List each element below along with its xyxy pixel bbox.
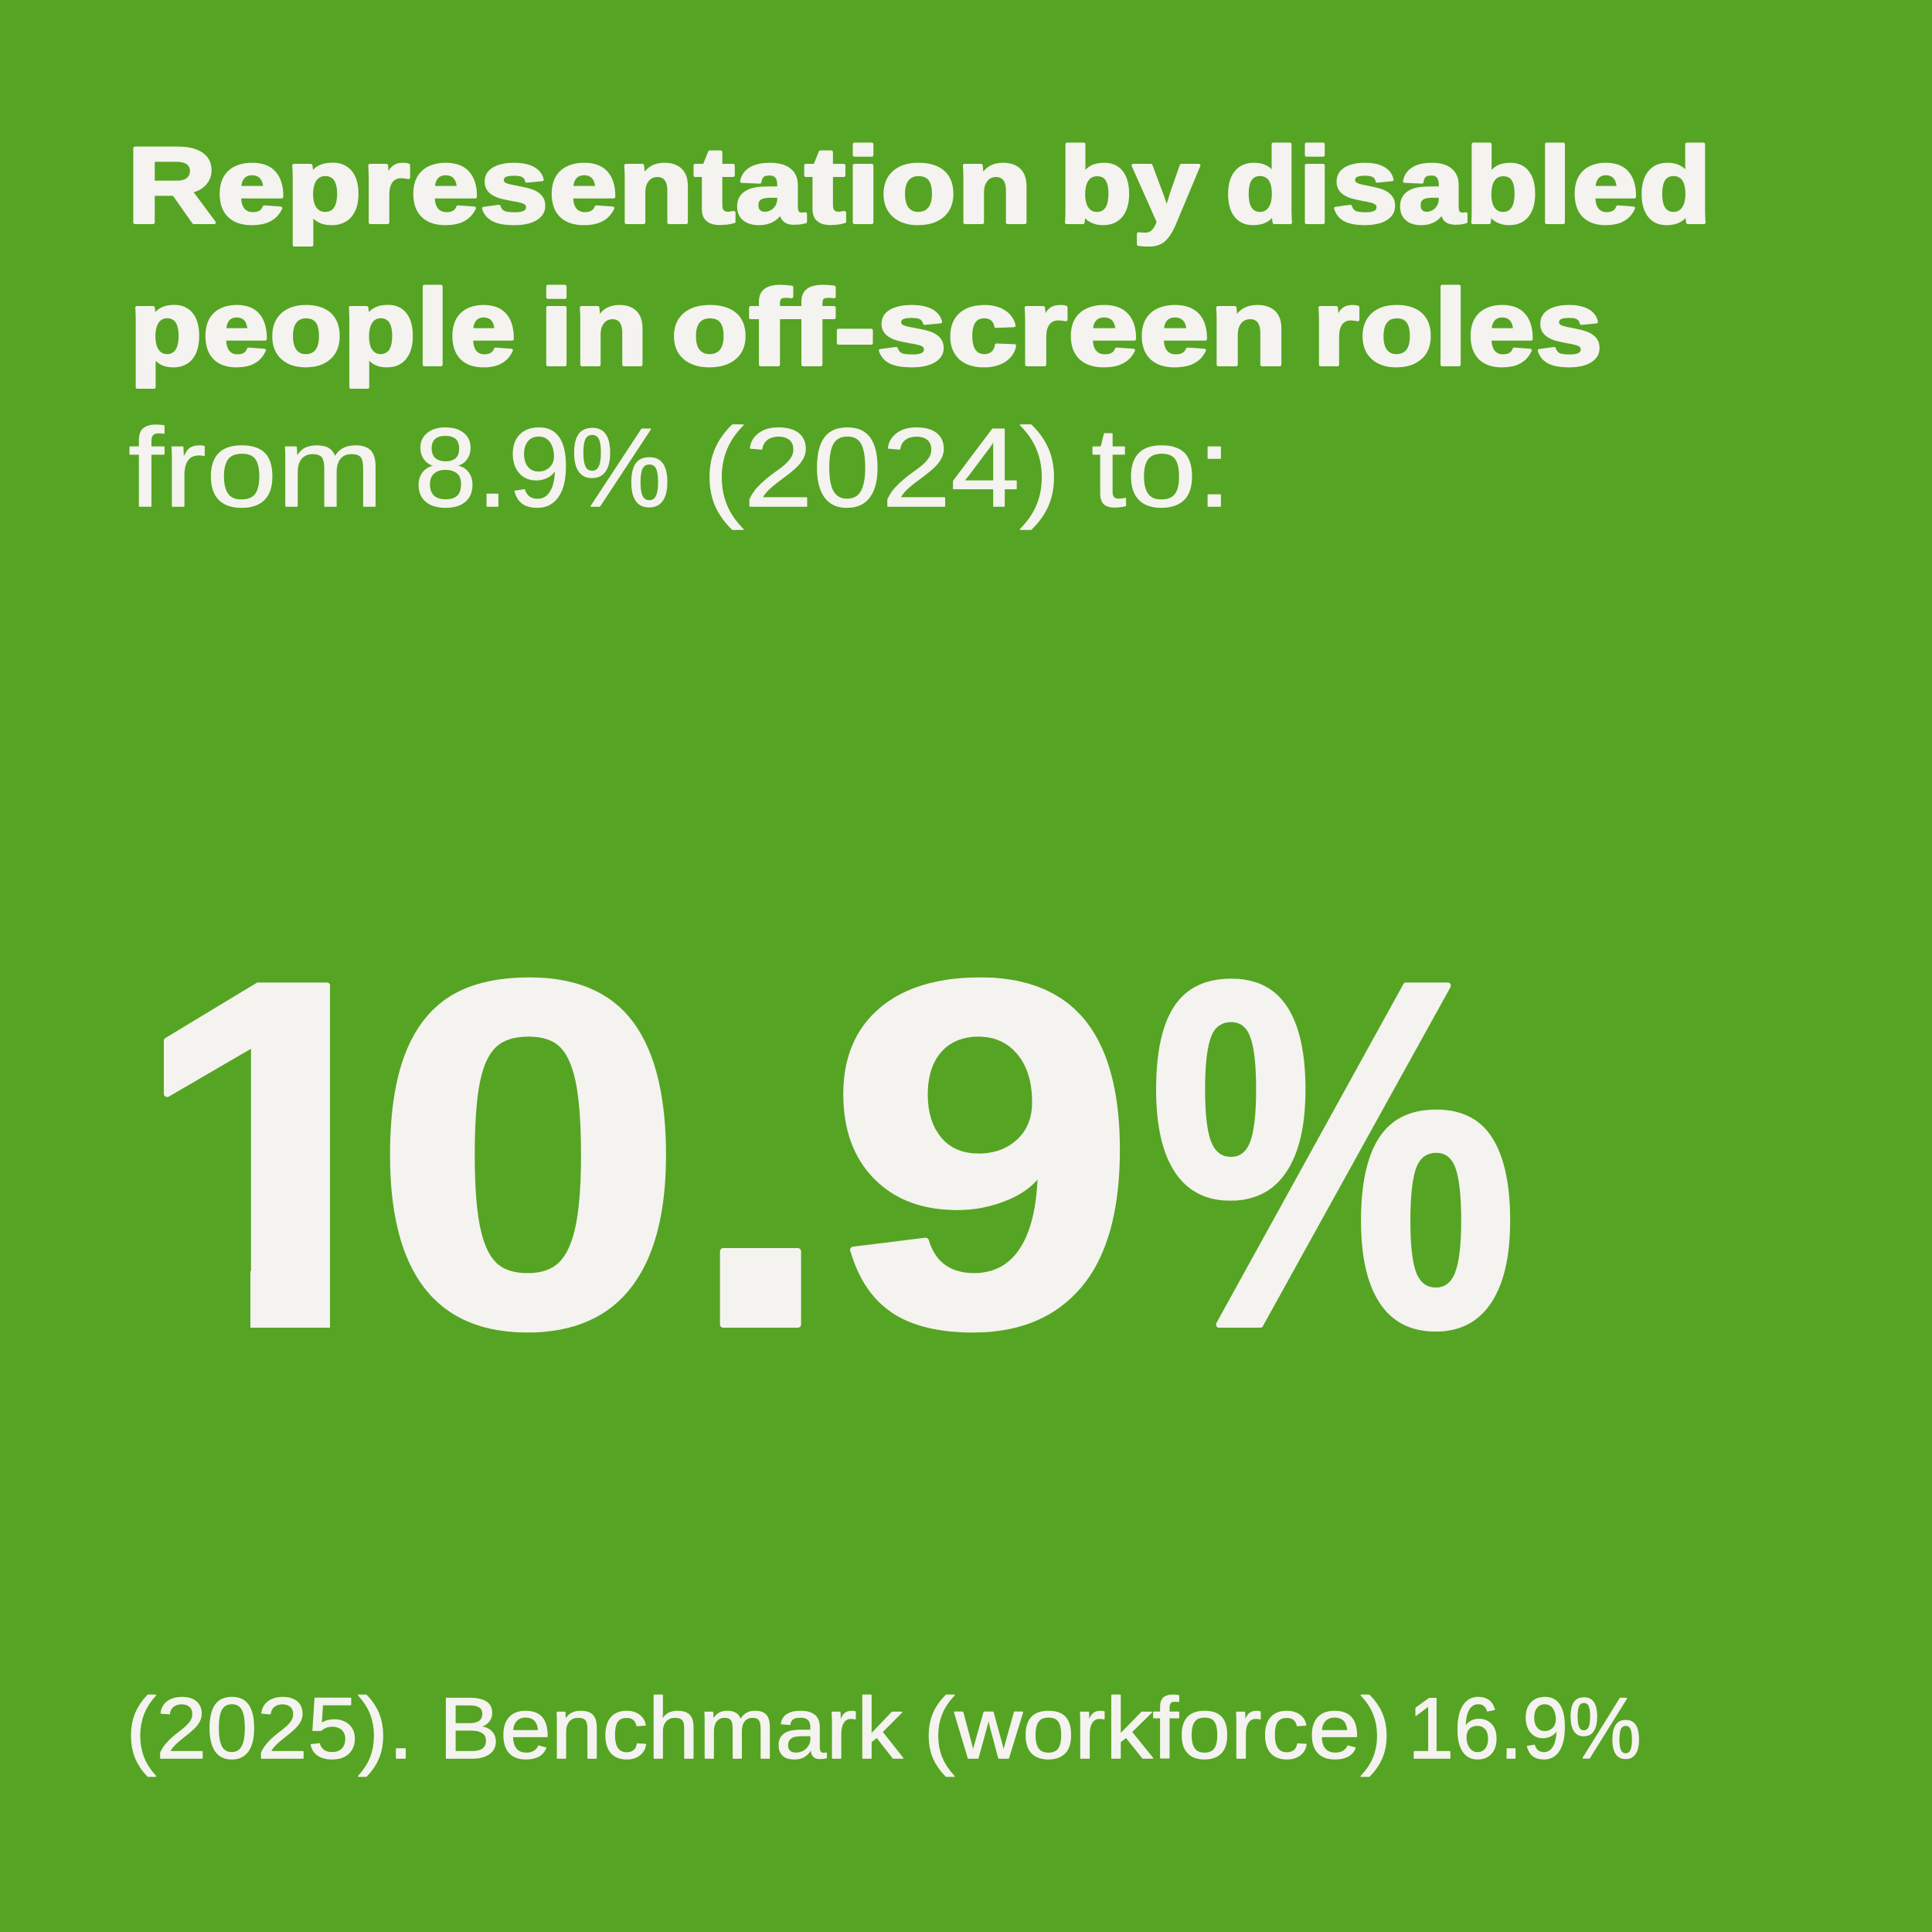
benchmark note (126, 1680, 1641, 1777)
big statistic: % (1148, 879, 1519, 1430)
benchmark note: (workforce) (923, 1680, 1392, 1777)
big statistic (164, 977, 1510, 1332)
subheading: previous value: from (128, 405, 383, 530)
heading: roles (1312, 267, 1603, 388)
subheading: previous value: to: (1091, 405, 1232, 530)
subheading: previous value: 8.9% (414, 405, 671, 530)
big statistic: 9 (828, 879, 1137, 1430)
big statistic: 1 (131, 879, 425, 1430)
big statistic: 0 (371, 879, 685, 1430)
subheading: previous value (128, 405, 1232, 530)
benchmark note: 16.9% (1408, 1680, 1641, 1777)
heading: off-screen (671, 267, 1287, 388)
heading: Representation (127, 124, 1032, 246)
big statistic: . (688, 879, 834, 1429)
subheading: previous value: (2024) (702, 405, 1061, 530)
heading (127, 124, 1712, 388)
heading: disabled (1225, 124, 1712, 246)
benchmark note: (2025). (126, 1680, 413, 1777)
heading: people (129, 267, 516, 388)
heading: by (1059, 124, 1199, 246)
infographic canvas (130, 142, 1706, 1777)
benchmark note: Benchmark (439, 1680, 903, 1777)
heading: in (539, 267, 648, 388)
